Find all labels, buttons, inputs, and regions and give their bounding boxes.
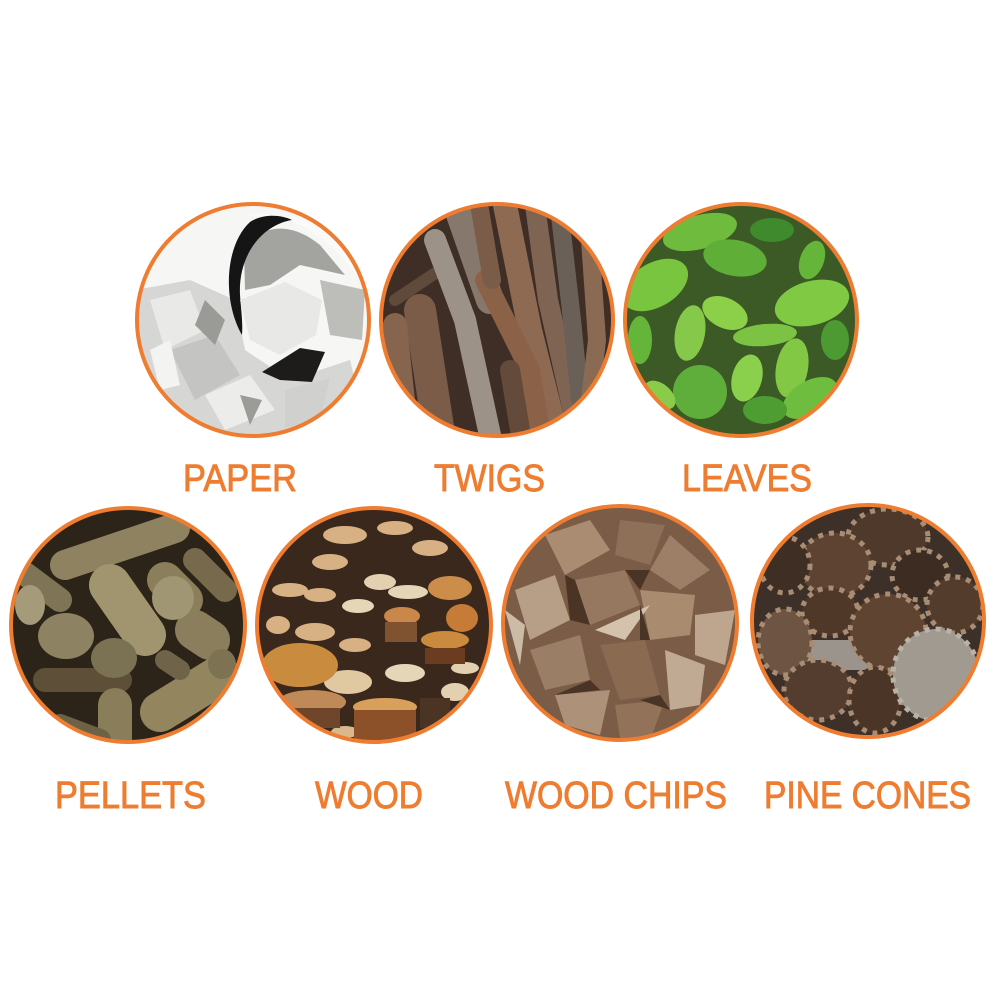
ring (137, 204, 369, 436)
panel: twigs (380, 200, 615, 500)
panel: wood chips (500, 505, 740, 817)
ring (381, 204, 613, 436)
label: PELLETS (55, 775, 206, 817)
photo: wood chips (500, 505, 740, 745)
ring (257, 508, 491, 742)
panel: pellets (8, 505, 248, 817)
photo: green leaves (627, 206, 855, 434)
ring (752, 505, 984, 737)
label: TWIGS (434, 458, 545, 500)
photo: log pile (255, 505, 495, 745)
label: LEAVES (682, 458, 812, 500)
panel: wood (255, 505, 495, 817)
label: PAPER (183, 458, 297, 500)
photo: stacked twigs (380, 200, 615, 440)
label: PINE CONES (764, 775, 971, 817)
panel: pine cones (750, 505, 990, 817)
ring (503, 506, 737, 740)
photo: compressed pellets (8, 505, 248, 745)
label: WOOD (315, 775, 423, 817)
panel: leaves (613, 200, 860, 500)
ring (11, 508, 245, 742)
panel: paper (130, 200, 380, 500)
ring (625, 204, 857, 436)
photo: crumpled paper (139, 206, 367, 434)
label: WOOD CHIPS (505, 775, 727, 817)
photo: pine cones (750, 505, 990, 745)
